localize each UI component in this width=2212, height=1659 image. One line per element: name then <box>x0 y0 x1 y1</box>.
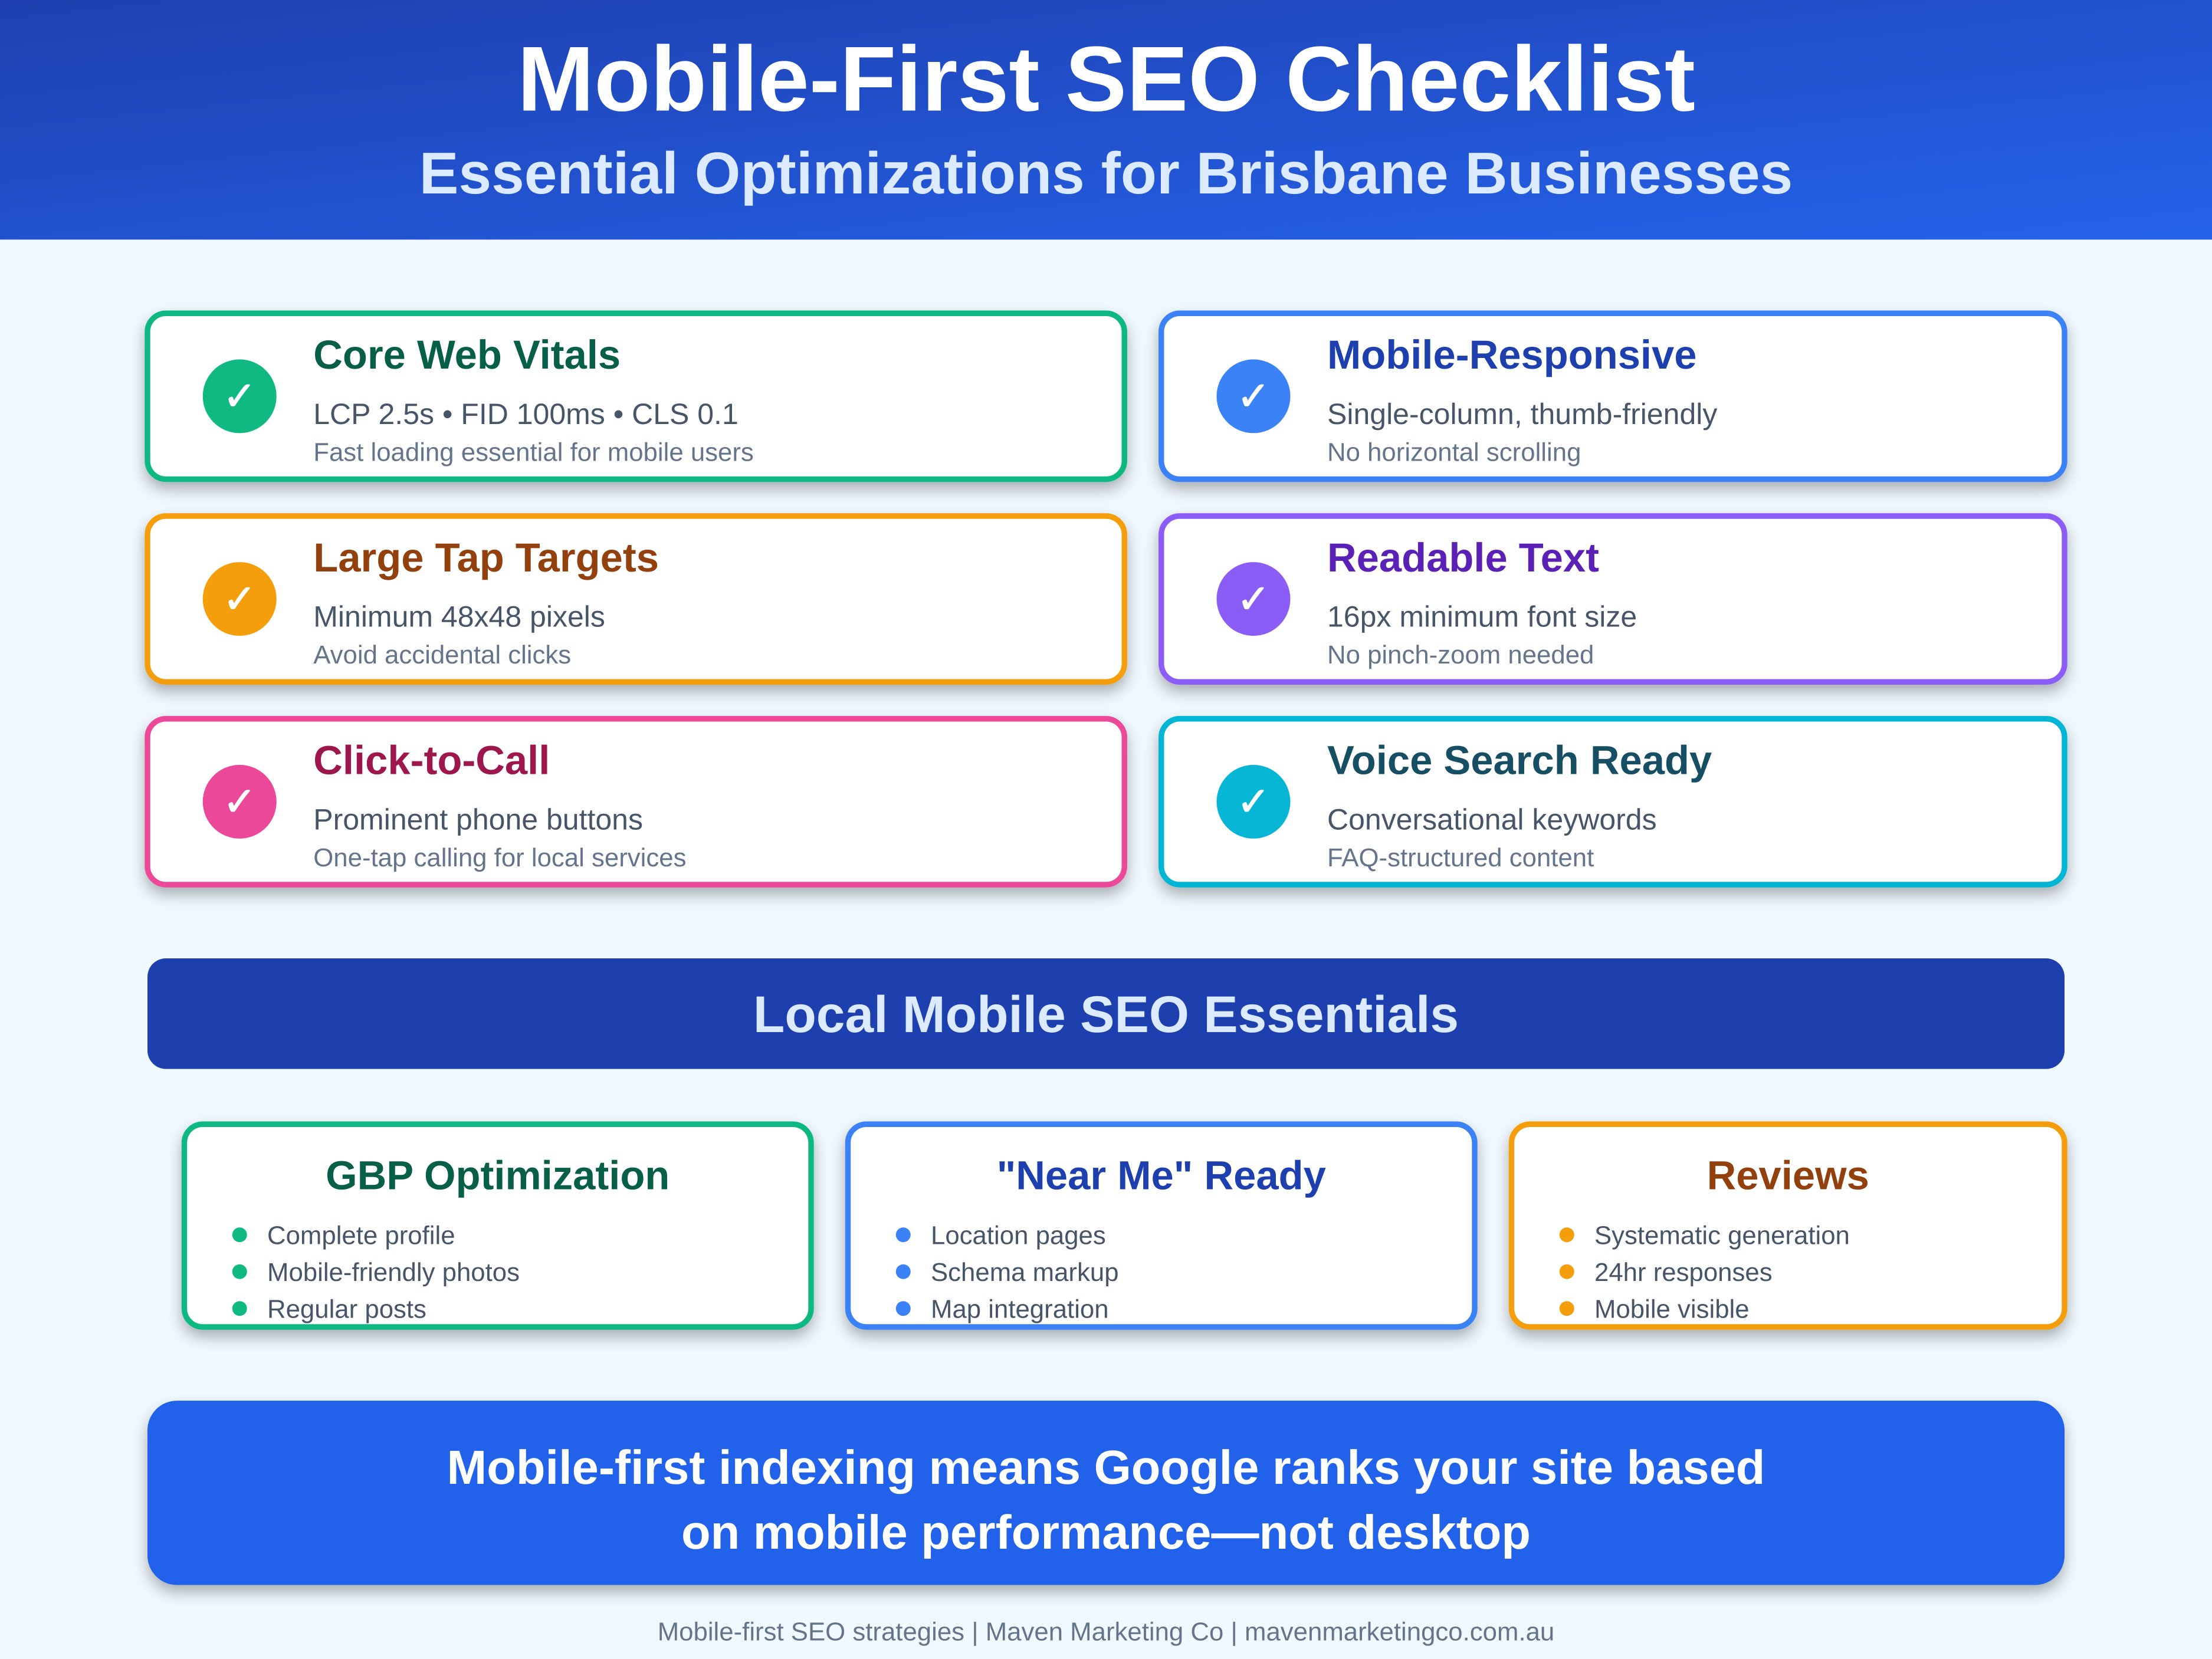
card note: No pinch-zoom needed <box>1327 640 1594 669</box>
panel: Near Me Ready <box>848 1124 1475 1327</box>
list item: Regular posts <box>267 1295 426 1323</box>
card note: Fast loading essential for mobile users <box>313 438 754 467</box>
panel: Reviews <box>1511 1124 2065 1327</box>
section banner: Local Mobile SEO Essentials: Local Mobile SEO Essentials <box>753 985 1459 1043</box>
card: Readable Text <box>1161 516 2065 682</box>
card: Core Web Vitals <box>147 313 1124 479</box>
section banner: Local Mobile SEO Essentials <box>147 958 2065 1069</box>
card title: Large Tap Targets <box>313 535 659 580</box>
card detail: Minimum 48x48 pixels <box>313 600 605 633</box>
icon: blue check <box>1216 359 1291 433</box>
title: Mobile-First SEO Checklist <box>517 28 1695 131</box>
card: Voice Search Ready <box>1161 719 2065 885</box>
card detail: Prominent phone buttons <box>313 803 643 836</box>
list item: Location pages <box>931 1221 1106 1250</box>
header band <box>0 0 2212 239</box>
panel heading: Reviews <box>1707 1152 1869 1198</box>
card note: One-tap calling for local services <box>313 843 686 872</box>
list item: Complete profile <box>267 1221 455 1250</box>
icon: blue check: ✓ <box>1237 373 1270 420</box>
card title: Mobile-Responsive <box>1327 332 1697 377</box>
icon: pink check <box>203 765 277 839</box>
subtitle: Essential Optimizations for Brisbane Businesses <box>419 140 1793 206</box>
list item: Schema markup <box>931 1258 1119 1287</box>
footer credit: Mobile-first SEO strategies | Maven Marketing Co | mavenmarketingco.com.au <box>658 1617 1554 1646</box>
icon: cyan check <box>1216 765 1291 839</box>
panel heading: "Near Me" Ready <box>997 1152 1326 1198</box>
card note: No horizontal scrolling <box>1327 438 1581 467</box>
icon: green check: ✓ <box>223 373 257 420</box>
icon: purple check <box>1216 562 1291 636</box>
card title: Readable Text <box>1327 535 1599 580</box>
panel: GBP Optimization <box>184 1124 811 1327</box>
list item: Mobile-friendly photos <box>267 1258 520 1287</box>
callout: mobile-first indexing: Mobile-first indexing means Google ranks your site based <box>447 1441 1765 1494</box>
card: Click-to-Call <box>147 719 1124 885</box>
callout: mobile-first indexing: on mobile performance—not desktop <box>681 1506 1531 1559</box>
list item: Mobile visible <box>1594 1295 1750 1323</box>
icon: green check <box>203 359 277 433</box>
list item: Systematic generation <box>1594 1221 1850 1250</box>
card title: Click-to-Call <box>313 737 550 783</box>
callout: mobile-first indexing <box>147 1401 2065 1585</box>
list item: Map integration <box>931 1295 1109 1323</box>
panel heading: GBP Optimization <box>326 1152 669 1198</box>
card detail: Single-column, thumb-friendly <box>1327 397 1717 431</box>
list item: 24hr responses <box>1594 1258 1773 1287</box>
icon: amber check: ✓ <box>223 576 257 623</box>
icon: amber check <box>203 562 277 636</box>
icon: purple check: ✓ <box>1237 576 1270 623</box>
card note: Avoid accidental clicks <box>313 640 571 669</box>
card note: FAQ-structured content <box>1327 843 1594 872</box>
icon: pink check: ✓ <box>223 778 257 826</box>
card title: Voice Search Ready <box>1327 737 1712 783</box>
card detail: Conversational keywords <box>1327 803 1657 836</box>
card: Mobile-Responsive <box>1161 313 2065 479</box>
icon: cyan check: ✓ <box>1237 778 1270 826</box>
card: Large Tap Targets <box>147 516 1124 682</box>
card detail: LCP 2.5s • FID 100ms • CLS 0.1 <box>313 397 739 431</box>
card detail: 16px minimum font size <box>1327 600 1637 633</box>
card title: Core Web Vitals <box>313 332 621 377</box>
